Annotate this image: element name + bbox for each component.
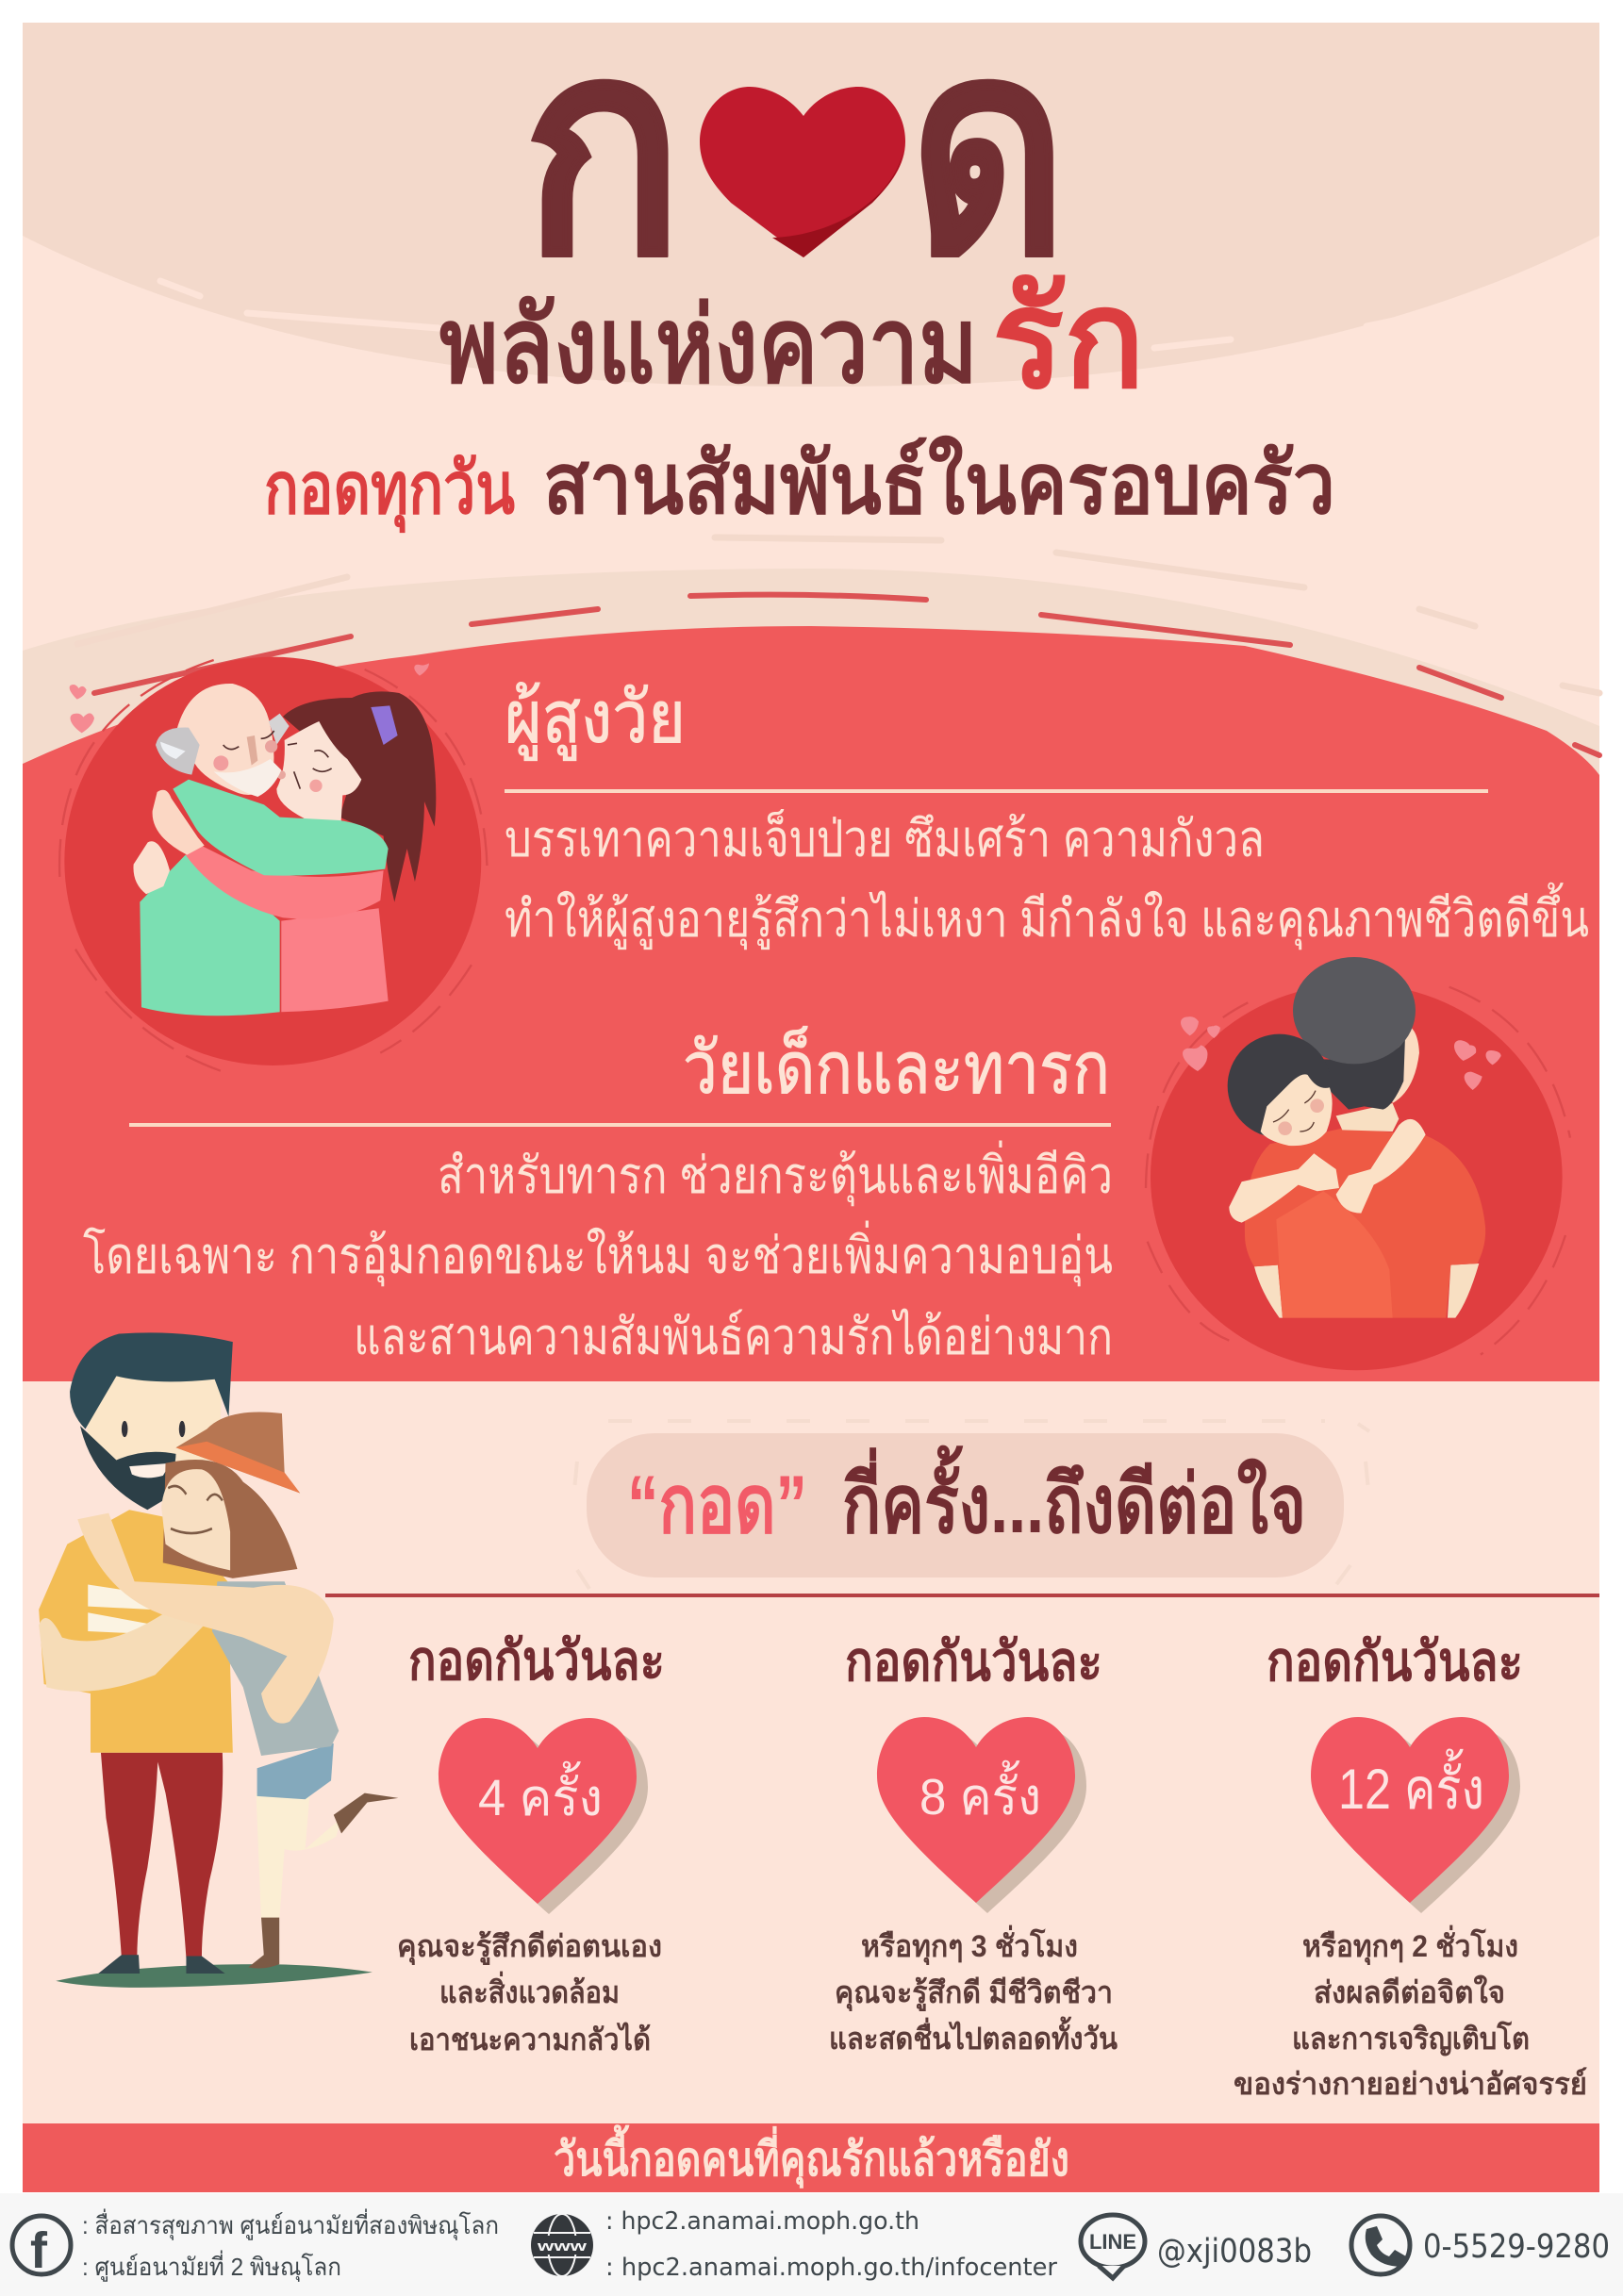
icon: heart 8 <box>877 1717 1086 1913</box>
icon: heart 4 <box>439 1718 648 1914</box>
heading: hug every day: กอดทุกวัน <box>264 449 515 534</box>
column: 8 times <box>829 1631 1118 2056</box>
text: websites: : hpc2.anamai.moph.go.th <box>605 2207 919 2236</box>
column: 12 times: กอดกันวันละ <box>1267 1631 1523 1693</box>
man's legs <box>101 1753 223 1957</box>
text block: children benefits: สำหรับทารก ช่วยกระตุ้นและเพิ่มอีคิว <box>438 1140 1113 1207</box>
text: facebook names <box>82 2208 499 2282</box>
column: 4 times <box>397 1630 665 2056</box>
icon: pink hearts <box>70 663 429 733</box>
text: facebook names: : สื่อสารสุขภาพ ศูนย์อนามัยที่สองพิษณุโลก <box>82 2208 499 2240</box>
woman's legs <box>257 1787 341 1921</box>
banner: call to action <box>23 2123 1599 2192</box>
text block: children benefits: และสานความสัมพันธ์ความรักได้อย่างมาก <box>354 1308 1113 1365</box>
green sleeve and body <box>140 851 280 1016</box>
column: 4 times: 4 ครั้ง <box>478 1761 603 1826</box>
text block: elderly benefits: บรรเทาความเจ็บป่วย ซึมเศร้า ความกังวล <box>505 809 1265 867</box>
divider: children <box>129 1123 1111 1127</box>
column: 4 times: กอดกันวันละ <box>408 1630 665 1692</box>
text: websites <box>605 2207 1057 2282</box>
column: 4 times: เอาชนะความกลัวได้ <box>409 2022 651 2056</box>
heading: hug every day: สานสัมพันธ์ในครอบครัว <box>543 436 1335 532</box>
footer <box>0 2193 1623 2296</box>
banner: how many hugs: “กอด” <box>627 1460 807 1550</box>
column: 8 times: 8 ครั้ง <box>919 1760 1041 1825</box>
title: hug with heart <box>522 0 1068 315</box>
woman's arm <box>77 1513 334 1724</box>
man's arm <box>39 1594 205 1692</box>
icon: pink hearts <box>1181 1016 1501 1090</box>
parent figure <box>1245 1226 1283 1318</box>
column: 8 times: กอดกันวันละ <box>845 1631 1102 1693</box>
text block: children benefits: โดยเฉพาะ การอุ้มกอดขณะให้นม จะช่วยเพิ่มความอบอุ่น <box>83 1220 1113 1287</box>
subtitle: power of love: รัก <box>992 262 1145 416</box>
illustration: couple hugging <box>39 1332 398 1988</box>
woman's head <box>163 1460 297 1578</box>
column: 12 times <box>1234 1631 1587 2101</box>
column: 4 times: คุณจะรู้สึกดีต่อตนเอง <box>397 1929 662 1966</box>
column: 8 times: หรือทุกๆ 3 ชั่วโมง <box>861 1924 1078 1966</box>
divider: under banner <box>325 1594 1599 1597</box>
icon: website <box>531 2214 593 2276</box>
man's head <box>86 1376 223 1500</box>
illustration: child hug <box>1146 957 1570 1370</box>
subtitle: power of love: พลังแห่งความ <box>439 287 978 405</box>
heading: hug every day <box>264 436 1335 534</box>
column: 8 times: และสดชื่นไปตลอดทั้งวัน <box>829 2016 1118 2056</box>
column: 12 times: ส่งผลดีต่อจิตใจ <box>1314 1974 1505 2009</box>
text block: elderly benefits <box>505 809 1589 950</box>
text: websites: : hpc2.anamai.moph.go.th/infocenter <box>605 2254 1057 2282</box>
icon: website: www <box>537 2238 587 2255</box>
text: line id: @xji0083b <box>1157 2233 1312 2271</box>
column: 12 times: 12 ครั้ง <box>1338 1748 1484 1821</box>
icon: heart 12 <box>1311 1717 1520 1913</box>
icon: title heart <box>700 87 905 257</box>
divider: elderly <box>505 789 1488 793</box>
banner: how many hugs: กี่ครั้ง...ถึงดีต่อใจ <box>842 1445 1306 1550</box>
column: 12 times: หรือทุกๆ 2 ชั่วโมง <box>1302 1924 1518 1966</box>
heading: children and infants: วัยเด็กและทารก <box>683 1026 1110 1109</box>
text: facebook names: : ศูนย์อนามัยที่ 2 พิษณุโลก <box>82 2250 341 2282</box>
banner: how many hugs <box>571 1421 1371 1594</box>
icon: line: LINE <box>1089 2230 1136 2254</box>
illustration: elder hug <box>59 657 488 1075</box>
child figure <box>1228 1034 1332 1138</box>
heading: elderly: ผู้สูงวัย <box>505 678 686 761</box>
column: 8 times: คุณจะรู้สึกดี มีชีวิตชีวา <box>835 1975 1113 2012</box>
icon: facebook: f <box>30 2222 48 2279</box>
text block: children benefits <box>83 1140 1113 1365</box>
column: 12 times: ของร่างกายอย่างน่าอัศจรรย์ <box>1234 2067 1587 2101</box>
icon: phone <box>1351 2216 1410 2274</box>
subtitle: power of love <box>439 262 1145 416</box>
column: 12 times: และการเจริญเติบโต <box>1292 2021 1530 2056</box>
icon: line <box>1081 2215 1145 2278</box>
column: 4 times: และสิ่งแวดล้อม <box>439 1971 620 2009</box>
panel: red section <box>23 595 1599 1381</box>
banner: call to action: วันนี้กอดคนที่คุณรักแล้วหรือยัง <box>554 2124 1069 2189</box>
icon: facebook <box>12 2216 71 2279</box>
